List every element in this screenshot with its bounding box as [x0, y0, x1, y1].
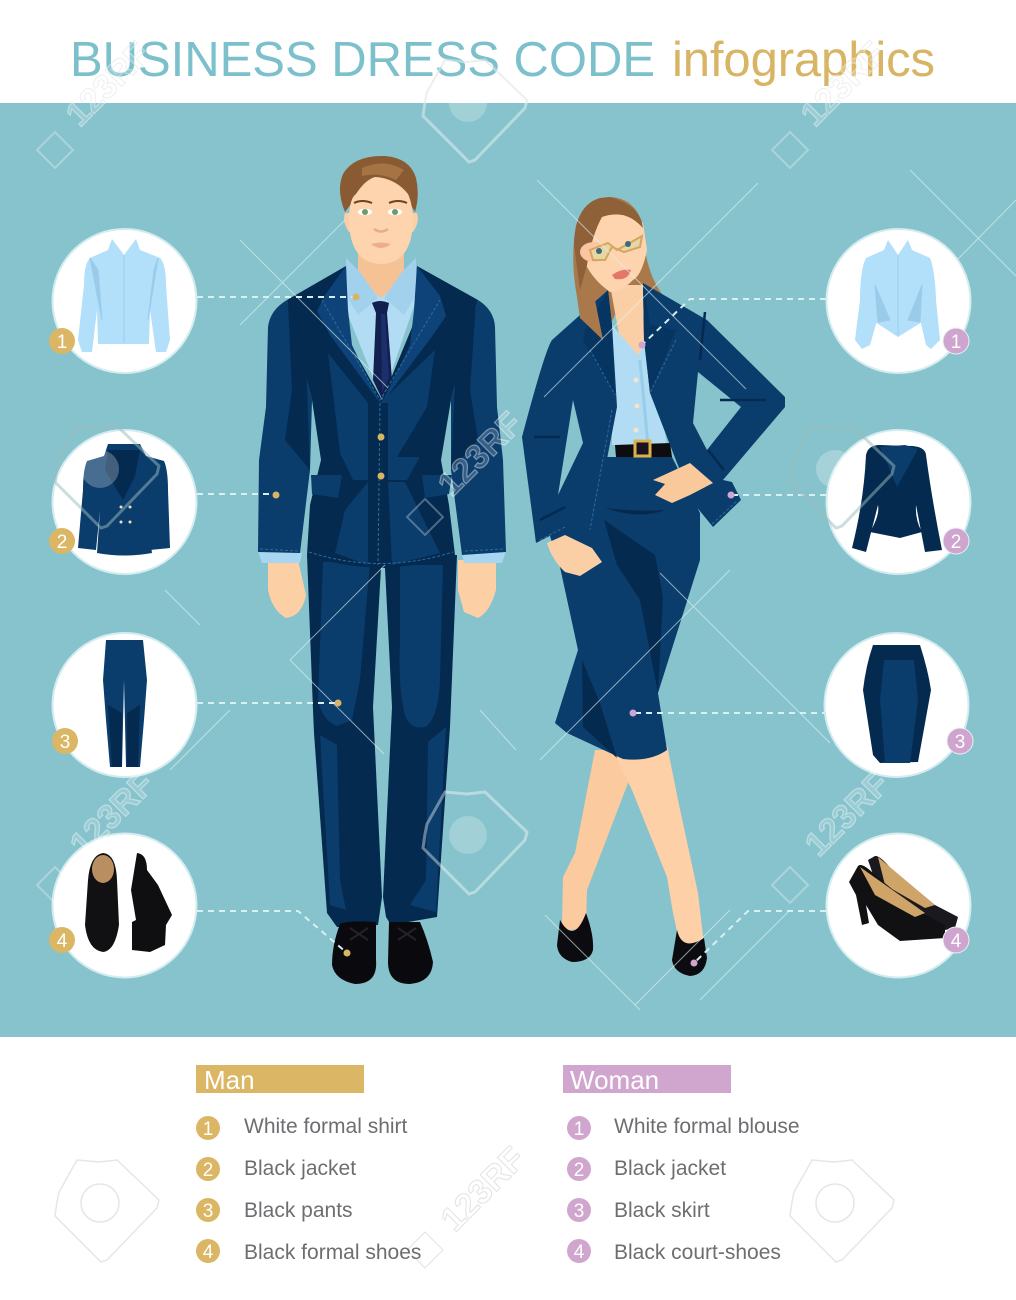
- figure: man: [258, 156, 506, 984]
- badge: man 3: [52, 728, 78, 754]
- gap under left arm: [558, 400, 583, 495]
- woman legend header: Woman: [570, 1065, 659, 1095]
- panel: blue background: [0, 103, 1016, 1037]
- badge: woman 1: [943, 328, 969, 354]
- anchor dots: [272, 294, 734, 966]
- watermark on title band: 123RF: [794, 35, 893, 134]
- woman skirt: [548, 457, 700, 760]
- connector lines: [197, 297, 828, 963]
- badge: man 3: 3: [60, 732, 70, 753]
- legend: man: [196, 1065, 421, 1264]
- man shirt cuffs: [258, 551, 506, 563]
- figure: woman: [522, 197, 785, 976]
- man legend header: Man: [204, 1065, 255, 1095]
- watermark: 123RF: [63, 765, 162, 864]
- woman legend item 1: 1: [574, 1119, 584, 1140]
- woman legend item 3: 3: [574, 1201, 584, 1222]
- woman hair back: [573, 197, 665, 340]
- badge: woman 1: 1: [951, 332, 961, 353]
- gap under right arm: [693, 372, 741, 450]
- woman legs: [562, 745, 704, 945]
- circle: man pants: [52, 633, 196, 777]
- man legend header: [196, 1065, 364, 1095]
- circle: man shoes: [49, 834, 196, 978]
- watermark: 123RF: [59, 35, 158, 134]
- badge: woman 4: 4: [951, 931, 962, 952]
- watermark on title band: [59, 35, 893, 162]
- woman face: [574, 197, 647, 292]
- man legend item 4: 4: [203, 1242, 214, 1263]
- man legend item 2: [196, 1157, 356, 1181]
- badge: woman 4: [943, 927, 969, 953]
- badge: man 4: [49, 927, 75, 953]
- woman legend item 2: [567, 1157, 726, 1181]
- man neck and head: [340, 156, 418, 300]
- watermark: 123RF: [434, 1140, 533, 1239]
- badge: woman 2: 2: [951, 532, 961, 553]
- watermark: 123RF: [794, 35, 893, 134]
- man hands: [268, 560, 496, 618]
- badge: man 2: [49, 528, 75, 554]
- man legend item 3: Black pants: [244, 1199, 353, 1222]
- badge: man 1: 1: [57, 332, 67, 353]
- woman belt: [615, 441, 672, 457]
- woman legend item 1: White formal blouse: [614, 1115, 800, 1138]
- man legend item 2: Black jacket: [244, 1157, 356, 1180]
- woman legend item 3: [567, 1198, 710, 1222]
- man legend item 4: Black formal shoes: [244, 1241, 421, 1264]
- woman shoes: [557, 913, 707, 976]
- man legend item 3: [196, 1198, 353, 1222]
- woman legend item 4: Black court-shoes: [614, 1241, 781, 1264]
- man shoes: [332, 921, 433, 984]
- circle: woman shoes: [826, 834, 970, 978]
- woman hands: [547, 463, 713, 576]
- circle: woman jacket: [826, 430, 970, 574]
- badge: man 1: [49, 328, 75, 354]
- woman legend item 2: Black jacket: [614, 1157, 726, 1180]
- legend: woman: [563, 1065, 800, 1264]
- man shirt and tie: [346, 258, 416, 400]
- badge: man 2: 2: [57, 532, 67, 553]
- man trousers: [307, 555, 457, 927]
- watermark: 123RF: [798, 765, 897, 864]
- badge: woman 3: [947, 728, 973, 754]
- watermark on title band: 123RF: [59, 35, 158, 134]
- circle: woman skirt: [824, 633, 973, 777]
- woman legend item 4: 4: [574, 1242, 585, 1263]
- woman legend item 2: 2: [574, 1160, 584, 1181]
- circle: man jacket: [49, 430, 196, 574]
- man legend item 3: 3: [203, 1201, 213, 1222]
- man jacket: [258, 266, 506, 568]
- woman legend header: [563, 1065, 731, 1095]
- badge: man 4: 4: [57, 931, 68, 952]
- woman legend item 3: Black skirt: [614, 1199, 710, 1222]
- watermark: 123RF: [431, 405, 530, 504]
- title: infographics: [672, 33, 935, 87]
- badge: woman 2: [943, 528, 969, 554]
- woman neck and blouse: [610, 285, 667, 445]
- badge: woman 3: 3: [955, 732, 965, 753]
- circle: man shirt: [49, 229, 196, 373]
- man legend item 2: 2: [203, 1160, 213, 1181]
- man legend item 1: 1: [203, 1119, 213, 1140]
- circle: woman blouse: [826, 229, 970, 373]
- man legend item 1: White formal shirt: [244, 1115, 408, 1138]
- title: BUSINESS DRESS CODE: [70, 33, 655, 87]
- woman jacket: [522, 283, 785, 543]
- diagonal hairlines: [165, 170, 1016, 1010]
- woman front hair strand: [575, 262, 603, 340]
